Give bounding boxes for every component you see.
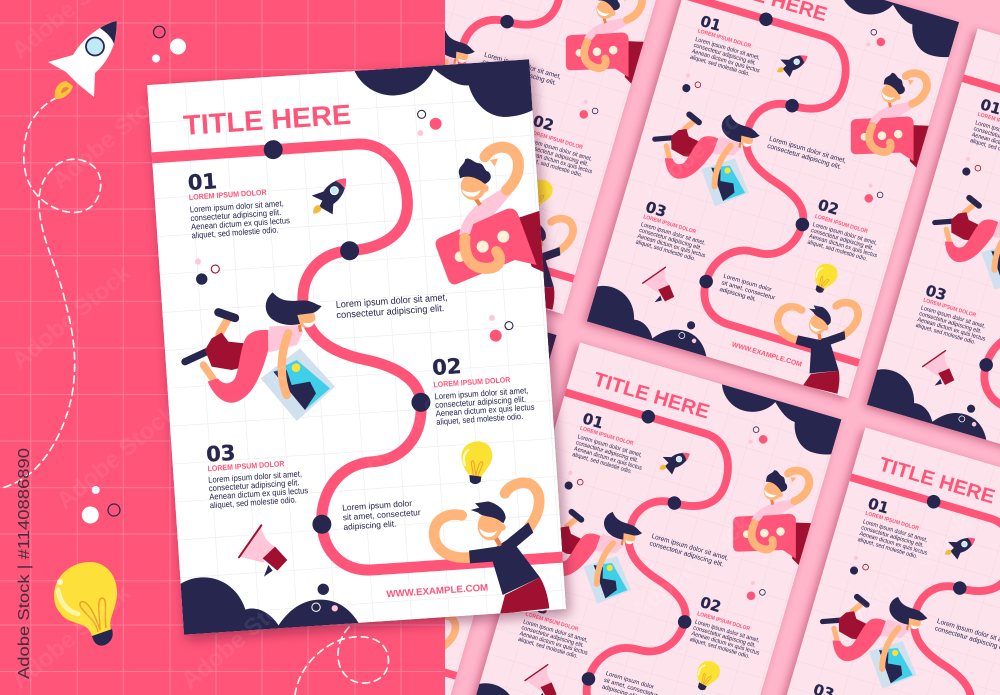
stock id label: Adobe Stock | #1140886890: [16, 448, 33, 679]
text: step 02: LOREM IPSUM DOLOR: [529, 130, 583, 151]
illustration: cheering man: [428, 477, 550, 614]
decorative dots: bottom: [82, 486, 120, 524]
text: step 03: 03: [205, 441, 236, 467]
text: lower caption: adipiscing elit.: [719, 287, 757, 303]
text: step 03: Lorem ipsum dolor sit amet,: [522, 619, 588, 644]
watermark text: Adobe Stock: [52, 399, 182, 515]
text: step 02: LOREM IPSUM DOLOR: [696, 611, 751, 632]
text: step 03: LOREM IPSUM DOLOR: [525, 612, 579, 633]
text: step 02: Lorem ipsum dolor sit amet,: [434, 385, 529, 401]
text: step 02: Aenean dictum ex quis lectus: [523, 150, 593, 175]
text: step 01: LOREM IPSUM DOLOR: [697, 28, 752, 50]
text: step 03: [517, 595, 599, 662]
text: step 01: Lorem ipsum dolor sit amet,: [694, 37, 761, 62]
text: step 02: consectetur adipiscing elit.: [525, 144, 589, 168]
flyer: top centre: [583, 0, 972, 405]
text: step 02: Aenean dictum ex quis lectus: [808, 234, 878, 259]
dashed flight path: [2, 98, 101, 488]
text: step 01: [969, 95, 1000, 164]
text: middle caption: consectetur adipiscing elit.: [336, 303, 445, 321]
decorative dots: top: [152, 26, 186, 62]
watermark text: Adobe Stock: [357, 359, 487, 475]
text: step 02: aliquet, sed molestie odio.: [436, 411, 523, 427]
text: lower caption: [719, 274, 778, 308]
text: step 03: LOREM IPSUM DOLOR: [642, 214, 697, 235]
website url: WWW.EXAMPLE.COM: [731, 341, 803, 369]
decorative dots: [186, 105, 531, 619]
text: step 03: 03: [924, 281, 949, 304]
text: lower caption: Lorem ipsum dolor: [723, 274, 772, 293]
flyer: right, top: [863, 28, 1000, 488]
text: step 01: aliquet, sed molestie odio.: [571, 452, 633, 475]
text: lower caption: adipiscing elit.: [343, 518, 397, 532]
title: TITLE HERE: [591, 369, 712, 424]
text: step 03: consectetur adipiscing elit.: [521, 625, 585, 649]
text: step 02: consectetur adipiscing elit.: [692, 625, 757, 649]
text: step 03: 03: [644, 198, 669, 221]
text: lower caption: sit amet, consectetur: [342, 507, 421, 522]
clouds: [180, 59, 532, 635]
text: step 01: [187, 164, 291, 240]
text: step 02: aliquet, sed molestie odio.: [807, 240, 868, 263]
watermark text: Adobe Stock: [327, 89, 457, 205]
text: step 03: aliquet, sed molestie odio.: [517, 637, 579, 660]
text: step 03: aliquet, sed molestie odio.: [210, 494, 297, 510]
text: step 01: Lorem ipsum dolor sit amet,: [190, 198, 284, 214]
watermark text: Adobe Stock: [177, 579, 307, 695]
text: step 03: Lorem ipsum dolor sit amet,: [640, 222, 706, 247]
text: step 02: LOREM IPSUM DOLOR: [814, 214, 868, 235]
watermark text: Adobe Stock: [7, 579, 137, 695]
icon: large rocket: [48, 21, 117, 99]
flyer: main, white: [147, 58, 585, 640]
icon: rocket: [312, 178, 346, 214]
path nodes: [263, 131, 439, 536]
text: middle caption: consectetur adipiscing elit.: [649, 540, 724, 569]
text: step 01: Lorem ipsum dolor sit amet,: [862, 519, 928, 544]
text: step 03: consectetur adipiscing elit.: [638, 228, 702, 252]
text: step 03: [915, 281, 996, 348]
watermark text: Adobe Stock: [47, 79, 177, 195]
text: lower caption: [342, 497, 422, 532]
text: step 03: aliquet, sed molestie odio.: [915, 323, 976, 346]
text: step 02: Lorem ipsum dolor sit amet,: [527, 138, 593, 163]
text: lower caption: Lorem ipsum dolor: [605, 671, 654, 691]
text: step 02: aliquet, sed molestie odio.: [522, 156, 583, 179]
flyer: behind main, top left: [445, 0, 658, 320]
text: step 02: Aenean dictum ex quis lectus: [691, 631, 760, 657]
text: step 01: Aenean dictum ex quis lectus: [573, 446, 643, 472]
text: step 01: consectetur adipiscing elit.: [693, 43, 757, 67]
text: step 03: Aenean dictum ex quis lectus: [637, 234, 706, 259]
text: step 01: aliquet, sed molestie odio.: [689, 55, 751, 78]
watermark text: Adobe Stock: [767, 229, 897, 345]
flyer: bottom right: [778, 426, 1000, 695]
text: step 01: Aenean dictum ex quis lectus: [191, 215, 290, 232]
text: step 01: Aenean dictum ex quis lectus: [859, 531, 928, 557]
text: step 01: consectetur adipiscing elit.: [860, 525, 924, 549]
text: step 03: Aenean dictum ex quis lectus: [917, 317, 986, 343]
text: step 03: consectetur adipiscing elit.: [918, 311, 982, 335]
text: middle caption: consectetur adipiscing elit.: [481, 59, 557, 87]
text: step 01: 01: [580, 409, 606, 432]
illustration: man with chat bubble: [436, 142, 544, 284]
text: step 02: [521, 112, 604, 181]
illustration: woman with picture: [181, 292, 335, 421]
text: step 03: 03: [526, 595, 551, 618]
panel: coral background with grid: [0, 0, 445, 695]
text: step 01: aliquet, sed molestie odio.: [857, 537, 918, 560]
text: step 02: LOREM IPSUM DOLOR: [433, 375, 511, 389]
watermark text: Adobe Stock: [7, 259, 137, 375]
text: step 02: Lorem ipsum dolor sit amet,: [812, 222, 878, 247]
text: step 01: Aenean dictum ex quis lectus: [691, 49, 760, 74]
text: step 03: Lorem ipsum dolor sit amet,: [208, 468, 302, 485]
text: step 01: 01: [187, 169, 218, 195]
flyer: behind main, lower left: [445, 332, 556, 695]
watermark text: Adobe Stock: [187, 339, 317, 455]
text: step 03: aliquet, sed molestie odio.: [635, 239, 696, 263]
text: step 01: [689, 12, 771, 80]
flyer: bottom centre: [466, 342, 854, 695]
text: middle caption: Lorem ipsum dolor sit amet,: [483, 52, 562, 81]
text: step 03: LOREM IPSUM DOLOR: [207, 459, 285, 473]
text: step 02: Aenean dictum ex quis lectus: [435, 402, 535, 418]
text: middle caption: Lorem ipsum dolor sit amet,: [335, 292, 448, 311]
icon: large light bulb: [54, 562, 117, 646]
text: step 02: 02: [431, 354, 462, 380]
text: step 03: LOREM IPSUM DOLOR: [922, 298, 977, 319]
text: step 01: consectetur adipiscing elit.: [575, 440, 639, 464]
text: step 01: LOREM IPSUM DOLOR: [579, 426, 634, 447]
website url: WWW.EXAMPLE.COM: [386, 582, 489, 600]
text: step 03: Aenean dictum ex quis lectus: [519, 631, 588, 657]
icon: megaphone: [238, 524, 288, 577]
watermark text: Adobe Stock: [847, 509, 977, 625]
title: TITLE HERE: [182, 99, 352, 141]
text: step 02: [806, 196, 889, 265]
text: step 01: [857, 494, 939, 563]
text: step 02: consectetur adipiscing elit.: [810, 228, 874, 252]
text: step 01: aliquet, sed molestie odio.: [191, 225, 279, 240]
text: step 02: [431, 349, 535, 427]
text: step 03: [635, 198, 716, 265]
watermark text: Adobe Stock: [627, 509, 757, 625]
text: step 02: Lorem ipsum dolor sit amet,: [694, 619, 760, 644]
dashed loop, bottom: [295, 626, 388, 695]
text: step 01: LOREM IPSUM DOLOR: [189, 188, 267, 202]
text: step 02: aliquet, sed molestie odio.: [689, 637, 750, 660]
text: step 01: consectetur adipiscing elit.: [190, 207, 282, 223]
winding path line: [152, 132, 563, 583]
text: step 02: 02: [698, 593, 723, 616]
text: step 02: 02: [531, 112, 556, 135]
text: step 01: 01: [866, 494, 891, 517]
title: TITLE HERE: [876, 454, 997, 509]
text: step 01: 01: [698, 12, 723, 35]
text: step 01: [571, 409, 653, 478]
text: step 03: Aenean dictum ex quis lectus: [209, 485, 308, 502]
text: lower caption: Lorem ipsum dolor: [342, 498, 412, 513]
text: step 03: Lorem ipsum dolor sit amet,: [920, 305, 986, 330]
text: step 03: [205, 436, 309, 510]
text: middle caption: Lorem ipsum dolor sit amet,: [651, 533, 729, 562]
text: step 03: consectetur adipiscing elit.: [208, 477, 300, 493]
text: step 01: LOREM IPSUM DOLOR: [864, 511, 919, 532]
text: middle caption: consectetur adipiscing elit.: [766, 143, 842, 171]
text: step 01: Lorem ipsum dolor sit amet,: [577, 434, 643, 459]
text: middle caption: Lorem ipsum dolor sit amet,: [768, 136, 847, 165]
text: lower caption: sit amet, consectetur: [721, 280, 776, 302]
icon: light bulb: [461, 441, 492, 484]
watermark text: Adobe Stock: [637, 89, 767, 205]
text: step 02: 02: [816, 196, 841, 219]
text: step 02: consectetur adipiscing elit.: [435, 394, 526, 410]
text: step 02: [689, 593, 771, 663]
